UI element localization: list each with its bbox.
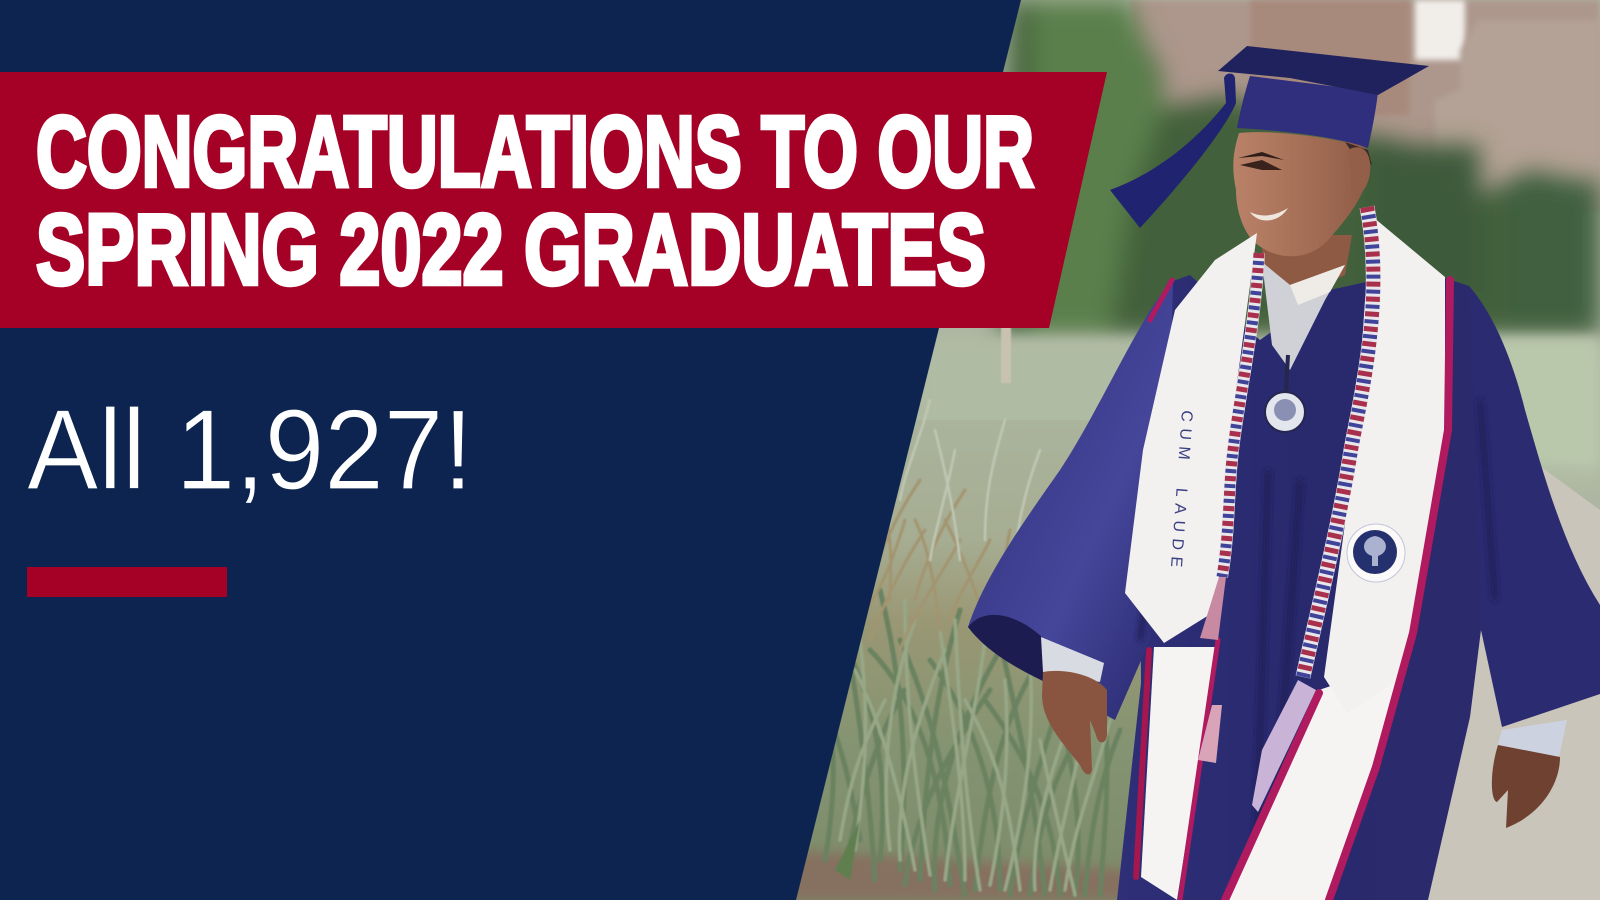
headline line 1: CONGRATULATIONS TO OUR bbox=[36, 96, 1034, 208]
headline line 2: SPRING 2022 GRADUATES bbox=[36, 194, 986, 306]
right hand bbox=[1492, 745, 1560, 828]
red headline banner bbox=[0, 72, 1107, 328]
right cuff bbox=[1498, 720, 1567, 757]
left stole lower bbox=[1141, 647, 1217, 900]
cord tassel left upper bbox=[1200, 577, 1226, 640]
face bbox=[1233, 132, 1370, 256]
eyes and smile bbox=[1238, 152, 1288, 221]
cord tassel left lower bbox=[1198, 705, 1222, 763]
neck bbox=[1260, 235, 1352, 295]
ear bbox=[1348, 147, 1370, 194]
headline bbox=[36, 96, 1034, 306]
mortarboard top bbox=[1218, 46, 1429, 95]
honor cord left bbox=[1222, 253, 1259, 577]
honor cord right bbox=[1303, 207, 1373, 677]
sleeve opening bbox=[968, 615, 1045, 682]
undershirt bbox=[1290, 265, 1345, 305]
gown folds bbox=[1140, 400, 1495, 900]
right stole upper bbox=[1324, 217, 1445, 713]
mortarboard skull bbox=[1237, 76, 1378, 148]
left sleeve bbox=[968, 281, 1173, 720]
tassel bbox=[1110, 74, 1236, 228]
right sleeve bbox=[1455, 286, 1600, 727]
graduate figure bbox=[968, 46, 1600, 900]
photo background: city and park bbox=[780, 0, 1600, 900]
stole pink trim bbox=[1136, 280, 1450, 900]
left hand bbox=[1042, 671, 1107, 775]
medallion bbox=[1265, 355, 1305, 432]
stole lettering: CUM LAUDE bbox=[1167, 410, 1195, 574]
gown body bbox=[1117, 270, 1481, 900]
right stole lower bbox=[1225, 660, 1407, 900]
cord tassel right bbox=[1252, 680, 1316, 812]
left cuff bbox=[1041, 637, 1104, 682]
collared shirt bbox=[1262, 262, 1345, 370]
graduate count: All 1,927! bbox=[27, 387, 473, 514]
hairline bbox=[1345, 142, 1372, 165]
left stole upper bbox=[1125, 233, 1257, 643]
stole seal bbox=[1347, 524, 1405, 582]
photo: graduate walking in park bbox=[780, 0, 1600, 900]
ornamental grass clump bbox=[822, 400, 1120, 895]
red accent bar bbox=[27, 567, 227, 597]
navy diagonal panel bbox=[0, 0, 1021, 900]
